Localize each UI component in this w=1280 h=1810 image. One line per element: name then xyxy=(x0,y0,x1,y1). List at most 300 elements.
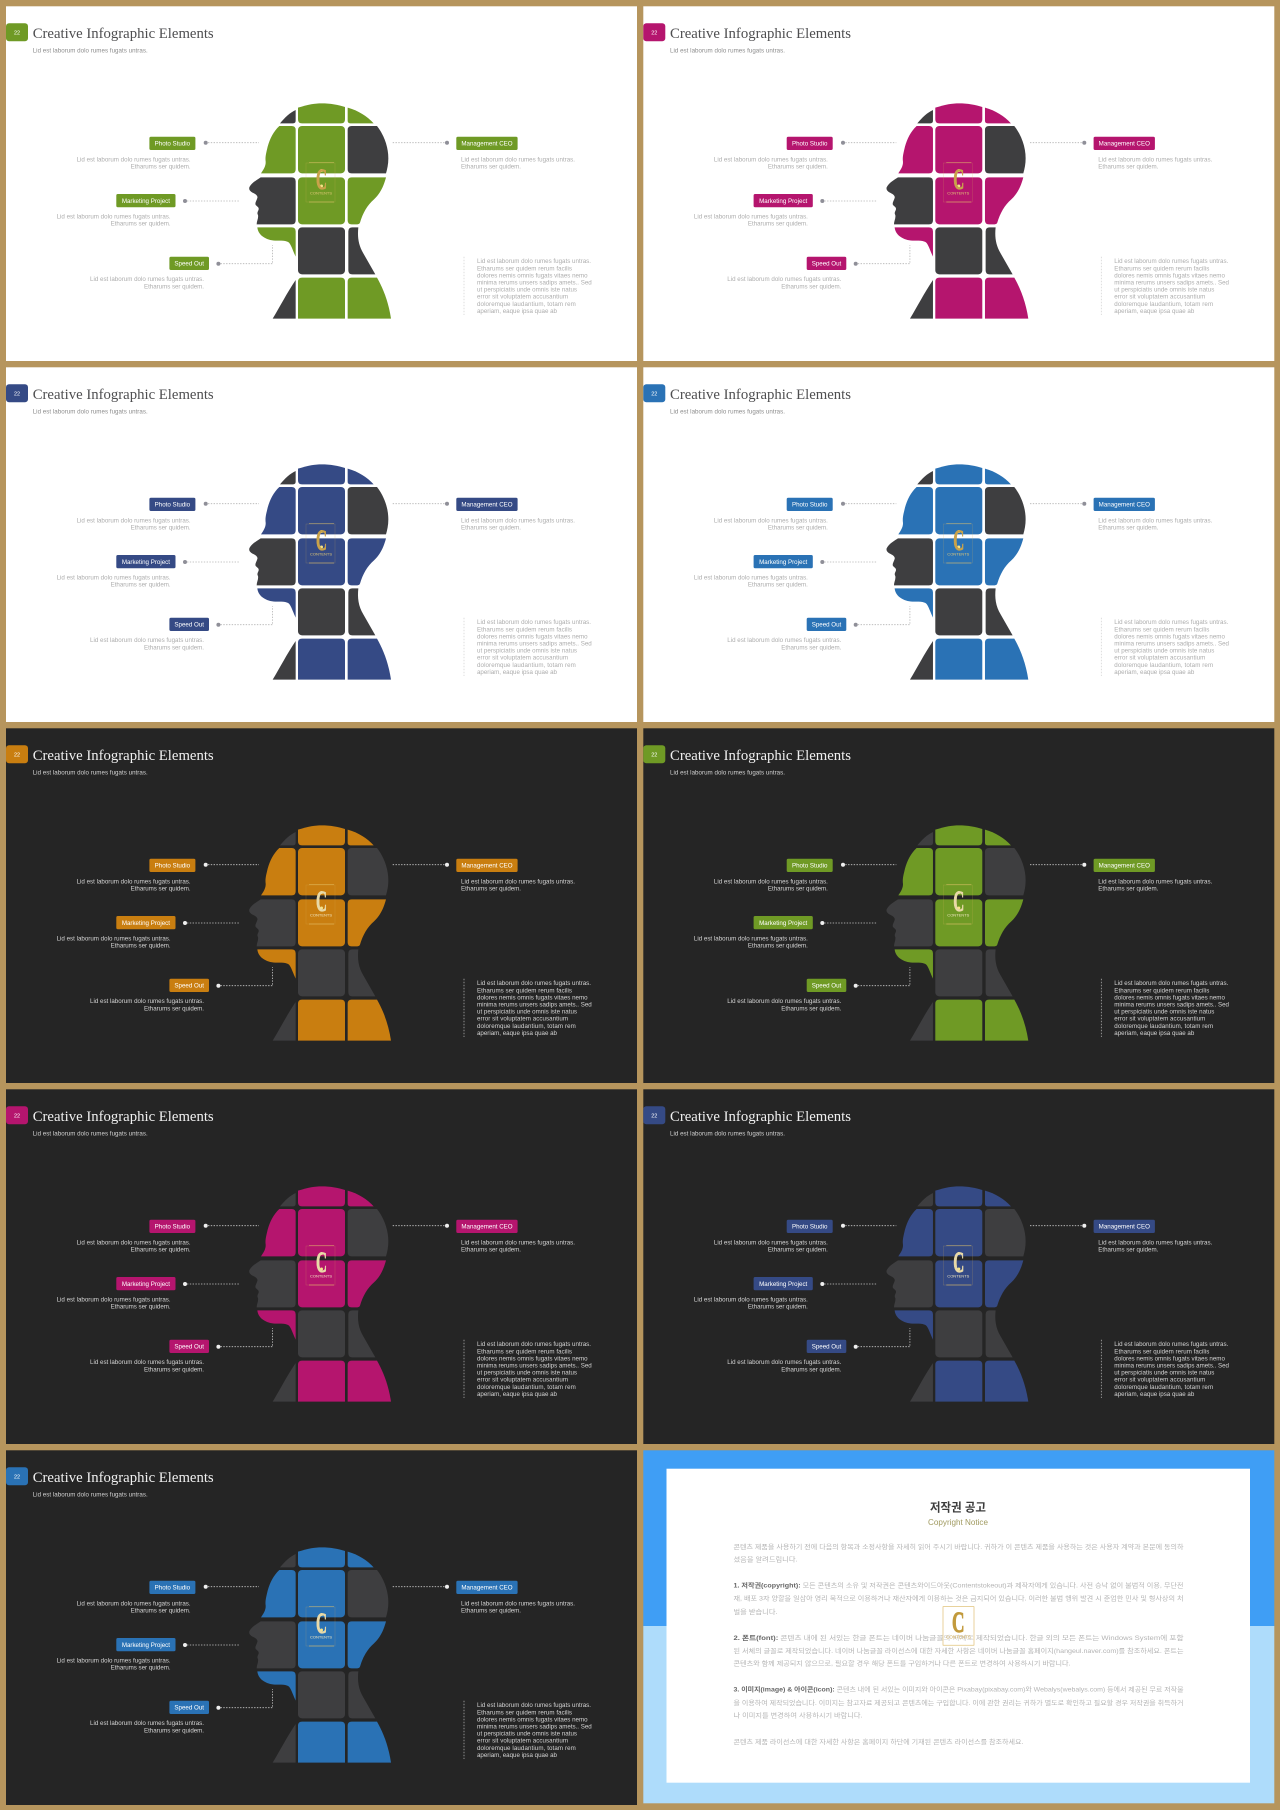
label: Management CEO: Management CEO xyxy=(461,862,513,870)
panel: navy light slide xyxy=(6,367,637,722)
text block: paragraph xyxy=(464,1340,592,1398)
text block: paragraph: dolores nemis omnis fugats vitaes nemo xyxy=(477,1355,588,1362)
text: Speed Out description: Etharums ser quidem. xyxy=(781,1367,842,1374)
text block: paragraph: doloremque laudantium, totam rem xyxy=(477,1384,576,1391)
label: Management CEO xyxy=(1094,137,1155,150)
label: Management CEO: Management CEO xyxy=(461,1224,513,1230)
label: Photo Studio xyxy=(787,859,833,872)
text block: paragraph: ut perspiciatis unde omnis iste natus xyxy=(477,1731,577,1738)
text block: paragraph: aperiam, eaque ipsa quae ab xyxy=(477,308,558,315)
label: Speed Out xyxy=(169,618,209,631)
text: Marketing Project description xyxy=(57,213,171,228)
text block: paragraph: doloremque laudantium, totam rem xyxy=(477,662,576,669)
text: Photo Studio description xyxy=(77,156,191,170)
subtitle: Lid est laborum dolo rumes fugats untras. xyxy=(33,408,148,415)
label: Photo Studio xyxy=(149,1581,195,1594)
text block: paragraph: aperiam, eaque ipsa quae ab xyxy=(1114,1030,1195,1037)
label: Marketing Project: Marketing Project xyxy=(759,920,808,927)
text: Management CEO description xyxy=(461,156,575,170)
text block: paragraph: aperiam, eaque ipsa quae ab xyxy=(1114,1391,1195,1398)
text: Management CEO description: Etharums ser quidem. xyxy=(1098,164,1159,170)
label: Photo Studio: Photo Studio xyxy=(792,862,828,870)
text: Photo Studio description: Etharums ser quidem. xyxy=(131,1608,191,1614)
text: Speed Out description: Etharums ser quidem. xyxy=(144,645,204,652)
text: Management CEO description xyxy=(1098,156,1213,170)
text: Photo Studio description xyxy=(714,1239,828,1254)
text block: paragraph: Etharums ser quidem rerum facilis xyxy=(477,626,572,633)
panel: blue dark slide xyxy=(6,1450,637,1805)
connector: Marketing Project xyxy=(183,199,239,203)
text: Speed Out description: Lid est laborum dolo rumes fugats untras. xyxy=(727,1359,842,1366)
connector: Management CEO xyxy=(393,141,449,145)
icon: head silhouette xyxy=(887,464,1028,680)
text: Speed Out description: Lid est laborum dolo rumes fugats untras. xyxy=(90,637,204,644)
label: Speed Out: Speed Out xyxy=(812,260,842,268)
label: Marketing Project xyxy=(116,194,176,207)
text block: paragraph: dolores nemis omnis fugats vitaes nemo xyxy=(477,633,588,640)
connector: Speed Out xyxy=(216,606,273,627)
label: Management CEO xyxy=(1094,859,1155,872)
label: Management CEO: Management CEO xyxy=(461,502,513,508)
text: Marketing Project description: Lid est laborum dolo rumes fugats untras. xyxy=(694,1296,808,1303)
logo watermark xyxy=(943,1606,974,1645)
logo watermark: CONTENTS xyxy=(947,912,970,918)
text block: paragraph: minima rerums unsers sadips amets.. Sed xyxy=(477,280,592,287)
text block: paragraph: dolores nemis omnis fugats vitaes nemo xyxy=(1114,272,1225,279)
icon: head silhouette xyxy=(249,1547,391,1763)
text block: paragraph: Lid est laborum dolo rumes fugats untras. xyxy=(1114,1341,1229,1348)
text block: paragraph: Etharums ser quidem rerum facilis xyxy=(1114,987,1209,994)
text: Marketing Project description xyxy=(694,213,808,228)
badge xyxy=(643,745,665,763)
badge xyxy=(6,1106,28,1124)
connector: Speed Out xyxy=(854,245,910,266)
text block: copyright terms: 된 서체의 글꼴로 제작되었습니다. 네이버 나눔글꼴 라이선스에 대한 자세한 사항은 네이버 나눔글꼴 홈페이지(hangeul.naver.com)를 참조하세요. 폰트는 xyxy=(734,1646,1184,1655)
panel: green dark slide xyxy=(643,728,1274,1083)
text: Speed Out description xyxy=(90,637,204,652)
logo watermark: CONTENTS xyxy=(947,1274,970,1278)
text: Marketing Project description: Lid est laborum dolo rumes fugats untras. xyxy=(57,935,171,942)
connector: Speed Out xyxy=(854,606,910,627)
label: Photo Studio xyxy=(787,498,833,511)
label: Management CEO: Management CEO xyxy=(461,140,513,148)
text block: paragraph: aperiam, eaque ipsa quae ab xyxy=(477,1030,558,1037)
text block: copyright terms: 벌을 받습니다. xyxy=(734,1607,778,1616)
text block: paragraph: dolores nemis omnis fugats vitaes nemo xyxy=(477,1716,588,1723)
label: Management CEO xyxy=(456,1220,518,1233)
text block: paragraph: aperiam, eaque ipsa quae ab xyxy=(1114,308,1195,315)
logo watermark xyxy=(306,1246,335,1285)
connector: Speed Out xyxy=(854,967,910,988)
logo watermark: CONTENTS xyxy=(310,912,332,918)
subtitle: Lid est laborum dolo rumes fugats untras. xyxy=(670,1130,785,1137)
badge xyxy=(6,1467,28,1485)
text block: paragraph: Lid est laborum dolo rumes fugats untras. xyxy=(477,619,591,626)
title: Creative Infographic Elements xyxy=(33,26,214,42)
text: Photo Studio description: Etharums ser quidem. xyxy=(768,886,828,892)
logo watermark xyxy=(306,885,335,924)
badge xyxy=(643,23,665,41)
connector: Speed Out xyxy=(216,1328,273,1349)
text: Speed Out description: Etharums ser quidem. xyxy=(144,1006,204,1013)
text: Photo Studio description: Lid est laborum dolo rumes fugats untras. xyxy=(77,1600,191,1607)
text: Photo Studio description: Lid est laborum dolo rumes fugats untras. xyxy=(77,517,191,524)
subtitle: Lid est laborum dolo rumes fugats untras. xyxy=(670,47,785,54)
connector: Photo Studio xyxy=(204,1585,259,1589)
text: Speed Out description: Lid est laborum dolo rumes fugats untras. xyxy=(90,276,204,283)
text: Management CEO description: Lid est laborum dolo rumes fugats untras. xyxy=(461,1600,575,1607)
logo watermark xyxy=(306,524,335,563)
subheading: Copyright Notice: Copyright Notice xyxy=(928,1518,989,1527)
text block: paragraph: ut perspiciatis unde omnis iste natus xyxy=(477,287,577,294)
icon: head silhouette xyxy=(249,1186,391,1402)
connector: Photo Studio xyxy=(841,502,896,506)
panel: navy dark slide xyxy=(643,1089,1274,1444)
text: Marketing Project description: Etharums ser quidem. xyxy=(748,1304,808,1311)
text block: paragraph: dolores nemis omnis fugats vitaes nemo xyxy=(1114,994,1225,1001)
badge: 22 xyxy=(651,30,657,36)
text block: paragraph: aperiam, eaque ipsa quae ab xyxy=(477,669,558,676)
icon: head silhouette xyxy=(887,825,1028,1041)
title: Creative Infographic Elements xyxy=(33,387,214,403)
text: Photo Studio description: Etharums ser quidem. xyxy=(131,1246,191,1254)
label: Management CEO: Management CEO xyxy=(1099,140,1150,148)
label: Marketing Project: Marketing Project xyxy=(759,198,808,205)
connector: Photo Studio xyxy=(841,141,896,145)
label: Photo Studio xyxy=(149,137,195,150)
label: Marketing Project: Marketing Project xyxy=(759,559,808,566)
badge xyxy=(643,1106,665,1124)
text block: copyright terms: 콘텐츠 제품을 사용하기 전에 다음의 항목과 소정사항을 자세히 읽어 주시기 바랍니다. 귀하가 이 콘텐츠 제품을 사용하는 것은 사용자 계약과 본문에 동의하 xyxy=(734,1542,1184,1551)
label: Speed Out: Speed Out xyxy=(174,1344,204,1350)
text block: paragraph: dolores nemis omnis fugats vitaes nemo xyxy=(477,994,588,1001)
subtitle: Lid est laborum dolo rumes fugats untras. xyxy=(33,1130,148,1137)
label: Speed Out: Speed Out xyxy=(174,260,204,268)
icon: head silhouette xyxy=(887,1186,1028,1402)
label: Marketing Project: Marketing Project xyxy=(122,1281,170,1288)
text block: paragraph: error sit voluptatem accusantium xyxy=(477,294,568,301)
text block: paragraph: doloremque laudantium, totam rem xyxy=(477,1745,576,1752)
label: Photo Studio: Photo Studio xyxy=(155,1224,191,1230)
text block: paragraph: Lid est laborum dolo rumes fugats untras. xyxy=(477,980,591,987)
text block: paragraph: error sit voluptatem accusantium xyxy=(477,1016,568,1023)
title: Creative Infographic Elements xyxy=(33,1109,214,1125)
logo watermark: C xyxy=(953,524,964,557)
text block: paragraph: doloremque laudantium, totam rem xyxy=(477,301,576,308)
label: Photo Studio: Photo Studio xyxy=(155,502,191,508)
connector: Speed Out xyxy=(854,1328,910,1349)
text: Marketing Project description xyxy=(694,574,808,589)
text block: paragraph: Etharums ser quidem rerum facilis xyxy=(477,987,572,994)
label: Management CEO xyxy=(1094,498,1155,511)
logo watermark: CONTENTS xyxy=(947,552,970,556)
text: Photo Studio description xyxy=(714,156,828,170)
text: Speed Out description xyxy=(727,276,842,291)
connector: Speed Out xyxy=(216,967,273,988)
label: Marketing Project xyxy=(116,1638,176,1651)
connector: Management CEO xyxy=(1030,863,1086,867)
text: Photo Studio description: Lid est laborum dolo rumes fugats untras. xyxy=(714,1239,828,1246)
text block: paragraph: Etharums ser quidem rerum facilis xyxy=(477,265,572,272)
panel: magenta dark slide xyxy=(6,1089,637,1444)
logo watermark: C xyxy=(316,163,327,196)
text block: paragraph: error sit voluptatem accusantium xyxy=(477,655,568,662)
text block: paragraph: ut perspiciatis unde omnis iste natus xyxy=(1114,1370,1214,1377)
title: Creative Infographic Elements xyxy=(670,748,851,764)
text block: paragraph: ut perspiciatis unde omnis iste natus xyxy=(1114,1009,1214,1016)
badge: 22 xyxy=(14,392,20,398)
logo watermark xyxy=(943,524,972,563)
icon: head silhouette xyxy=(249,464,391,680)
label: Speed Out xyxy=(807,257,846,270)
text block: paragraph: Lid est laborum dolo rumes fugats untras. xyxy=(1114,980,1229,987)
subtitle: Lid est laborum dolo rumes fugats untras. xyxy=(33,47,148,54)
label: Speed Out xyxy=(169,1340,209,1353)
text: Management CEO description xyxy=(461,517,575,532)
text: Speed Out description: Etharums ser quidem. xyxy=(144,1367,204,1374)
text block: copyright terms: 셨음을 알려드립니다. xyxy=(734,1555,798,1564)
text: Photo Studio description: Lid est laborum dolo rumes fugats untras. xyxy=(77,878,191,885)
text block: paragraph: dolores nemis omnis fugats vitaes nemo xyxy=(1114,633,1225,640)
connector: Marketing Project xyxy=(183,921,239,925)
text block: paragraph: Lid est laborum dolo rumes fugats untras. xyxy=(1114,258,1229,265)
text block: paragraph: minima rerums unsers sadips amets.. Sed xyxy=(477,1724,592,1731)
text: Speed Out description: Etharums ser quidem. xyxy=(144,1728,204,1735)
icon: head silhouette xyxy=(249,825,391,1041)
text: Management CEO description xyxy=(461,1600,575,1614)
text block: paragraph: Etharums ser quidem rerum facilis xyxy=(477,1709,572,1716)
label: Speed Out xyxy=(169,257,209,270)
label: Speed Out xyxy=(169,979,209,992)
text: Speed Out description: Lid est laborum dolo rumes fugats untras. xyxy=(727,276,842,283)
connector: Photo Studio xyxy=(841,863,896,867)
logo watermark: C xyxy=(316,1246,327,1279)
connector: Marketing Project xyxy=(820,560,876,564)
connector: Marketing Project xyxy=(183,1282,239,1286)
logo watermark: C xyxy=(316,524,327,557)
badge: 22 xyxy=(651,752,657,758)
subtitle: Lid est laborum dolo rumes fugats untras. xyxy=(670,769,785,776)
text: Management CEO description xyxy=(1098,878,1213,892)
text: Management CEO description: Lid est laborum dolo rumes fugats untras. xyxy=(461,156,575,163)
label: Photo Studio: Photo Studio xyxy=(155,1584,191,1592)
title: Creative Infographic Elements xyxy=(670,387,851,403)
text: Photo Studio description: Lid est laborum dolo rumes fugats untras. xyxy=(714,156,828,163)
label: Photo Studio xyxy=(787,137,833,150)
text: Photo Studio description: Lid est laborum dolo rumes fugats untras. xyxy=(714,517,828,524)
text: Management CEO description: Etharums ser quidem. xyxy=(461,1608,521,1614)
text block: paragraph: ut perspiciatis unde omnis iste natus xyxy=(1114,287,1214,294)
text block: paragraph: ut perspiciatis unde omnis iste natus xyxy=(1114,648,1214,655)
logo watermark: C xyxy=(316,1607,327,1640)
text: Photo Studio description: Etharums ser quidem. xyxy=(768,1246,828,1254)
connector: Management CEO xyxy=(1030,1224,1086,1228)
text block: paragraph: aperiam, eaque ipsa quae ab xyxy=(477,1391,558,1398)
text: Management CEO description: Etharums ser quidem. xyxy=(1098,524,1159,532)
text block: paragraph: error sit voluptatem accusantium xyxy=(1114,655,1205,662)
text block: paragraph xyxy=(464,979,592,1037)
label: Speed Out xyxy=(807,979,846,992)
label: Marketing Project: Marketing Project xyxy=(122,559,170,566)
label: Marketing Project: Marketing Project xyxy=(759,1281,808,1288)
label: Photo Studio xyxy=(149,859,195,872)
text: Management CEO description: Etharums ser quidem. xyxy=(461,886,521,892)
title: Creative Infographic Elements xyxy=(33,748,214,764)
connector: Photo Studio xyxy=(204,863,259,867)
text: Speed Out description: Lid est laborum dolo rumes fugats untras. xyxy=(90,1720,204,1727)
badge xyxy=(6,745,28,763)
text block: paragraph: aperiam, eaque ipsa quae ab xyxy=(477,1752,558,1759)
subtitle: Lid est laborum dolo rumes fugats untras. xyxy=(670,408,785,415)
connector: Photo Studio xyxy=(841,1224,896,1228)
text block: paragraph: minima rerums unsers sadips amets.. Sed xyxy=(477,641,592,648)
text block: copyright terms: 나 이미지를 변경하여 사용하시기 바랍니다. xyxy=(734,1711,863,1720)
label: Marketing Project xyxy=(754,1277,813,1290)
badge xyxy=(643,384,665,402)
icon: head silhouette xyxy=(887,103,1028,319)
connector: Photo Studio xyxy=(204,502,259,506)
text: Speed Out description: Etharums ser quidem. xyxy=(144,284,204,291)
label: Photo Studio xyxy=(149,1220,195,1233)
badge: 22 xyxy=(14,30,20,36)
text: Management CEO description: Etharums ser quidem. xyxy=(1098,886,1159,892)
text block: copyright terms: 콘텐츠와 함께 제공되지 않으므로, 필요할 경우 해당 폰트를 구입하거나 다른 폰트로 변경하여 사용하시기 바랍니다. xyxy=(734,1659,1071,1668)
text block: paragraph xyxy=(1101,618,1230,676)
label: Marketing Project xyxy=(754,555,813,568)
label: Photo Studio: Photo Studio xyxy=(155,862,191,870)
badge: 22 xyxy=(14,1114,20,1120)
text: Management CEO description: Lid est laborum dolo rumes fugats untras. xyxy=(1098,878,1213,885)
label: Management CEO: Management CEO xyxy=(1099,502,1150,508)
panel: orange dark slide xyxy=(6,728,637,1083)
connector: Management CEO xyxy=(393,863,449,867)
text: Management CEO description: Lid est laborum dolo rumes fugats untras. xyxy=(461,1239,575,1246)
badge xyxy=(6,23,28,41)
label: Management CEO: Management CEO xyxy=(1099,1224,1150,1230)
connector: Management CEO xyxy=(1030,141,1086,145)
text: Marketing Project description: Lid est laborum dolo rumes fugats untras. xyxy=(57,1657,171,1664)
text: Marketing Project description: Lid est laborum dolo rumes fugats untras. xyxy=(57,1296,171,1303)
text: Management CEO description: Lid est laborum dolo rumes fugats untras. xyxy=(461,878,575,885)
text: Marketing Project description: Lid est laborum dolo rumes fugats untras. xyxy=(57,213,171,220)
text: Management CEO description: Etharums ser quidem. xyxy=(461,164,521,170)
logo watermark: CONTENTS xyxy=(310,1274,332,1278)
text block: paragraph: Lid est laborum dolo rumes fugats untras. xyxy=(477,1702,591,1709)
connector: Management CEO xyxy=(1030,502,1086,506)
text: Photo Studio description xyxy=(714,517,828,532)
text: Photo Studio description: Etharums ser quidem. xyxy=(131,524,191,532)
text: Marketing Project description: Lid est laborum dolo rumes fugats untras. xyxy=(57,574,171,581)
text: Speed Out description xyxy=(90,998,204,1013)
connector: Management CEO xyxy=(393,1585,449,1589)
logo watermark xyxy=(943,885,972,924)
label: Management CEO xyxy=(456,859,518,872)
badge: 22 xyxy=(651,1114,657,1120)
logo watermark: C xyxy=(953,1246,964,1279)
title: Creative Infographic Elements xyxy=(670,1109,851,1125)
text: Speed Out description xyxy=(90,1720,204,1735)
text: Marketing Project description: Etharums ser quidem. xyxy=(111,1304,171,1311)
logo watermark: C xyxy=(953,885,964,918)
text block: paragraph: error sit voluptatem accusantium xyxy=(477,1377,568,1384)
text: Speed Out description: Lid est laborum dolo rumes fugats untras. xyxy=(727,998,842,1005)
title: Creative Infographic Elements xyxy=(670,26,851,42)
text block: copyright terms: 1. 저작권(copyright): 모든 콘텐츠의 소유 및 저작권은 콘텐츠와이드아웃(Contentstokeout)과 제작자에게 있습니다. 사전 승낙 없이 불법적 이용, 무단전 xyxy=(734,1581,1184,1590)
text block: paragraph xyxy=(1101,257,1230,315)
text block: paragraph: minima rerums unsers sadips amets.. Sed xyxy=(1114,1363,1230,1370)
text block: paragraph: Etharums ser quidem rerum facilis xyxy=(477,1348,572,1355)
logo watermark: CONTENTS xyxy=(310,190,332,196)
badge: 22 xyxy=(14,752,20,758)
text block: paragraph: Etharums ser quidem rerum facilis xyxy=(1114,265,1209,272)
text block: paragraph: dolores nemis omnis fugats vitaes nemo xyxy=(477,272,588,279)
text block: paragraph: minima rerums unsers sadips amets.. Sed xyxy=(1114,1002,1230,1009)
label: Photo Studio: Photo Studio xyxy=(155,140,191,148)
logo watermark: CONTENTS xyxy=(946,1634,971,1640)
text: Photo Studio description xyxy=(77,517,191,532)
label: Marketing Project: Marketing Project xyxy=(122,1642,170,1649)
text: Marketing Project description: Etharums ser quidem. xyxy=(111,582,171,589)
connector: Marketing Project xyxy=(183,560,239,564)
badge: 22 xyxy=(651,392,657,398)
text block: paragraph: minima rerums unsers sadips amets.. Sed xyxy=(477,1363,592,1370)
label: Management CEO xyxy=(456,498,518,511)
label: Speed Out: Speed Out xyxy=(812,622,842,628)
text: Marketing Project description xyxy=(57,574,171,589)
text: Marketing Project description: Etharums ser quidem. xyxy=(111,1665,171,1672)
text: Management CEO description xyxy=(461,878,575,892)
text block: paragraph: ut perspiciatis unde omnis iste natus xyxy=(477,1009,577,1016)
text: Marketing Project description xyxy=(57,1296,171,1311)
panel: magenta light slide xyxy=(643,6,1274,361)
label: Speed Out xyxy=(807,1340,846,1353)
text block: copyright terms: 을 이용하여 제작되었습니다. 이미지는 참고자료 제공되고 콘텐츠에는 구입합니다. 이에 관한 권리는 귀하가 별도로 확인하고 필요할 경우 저작권을 취득하거 xyxy=(734,1698,1184,1707)
label: Photo Studio xyxy=(149,498,195,511)
label: Management CEO: Management CEO xyxy=(1099,862,1150,870)
label: Management CEO xyxy=(456,137,518,150)
text: Marketing Project description: Etharums ser quidem. xyxy=(748,221,808,228)
text block: paragraph: doloremque laudantium, totam rem xyxy=(1114,301,1213,308)
text: Marketing Project description xyxy=(694,1296,808,1311)
text: Marketing Project description: Etharums ser quidem. xyxy=(111,221,171,228)
text block: paragraph: error sit voluptatem accusantium xyxy=(1114,294,1205,301)
text: Management CEO description: Lid est laborum dolo rumes fugats untras. xyxy=(1098,156,1213,163)
text block: paragraph: Etharums ser quidem rerum facilis xyxy=(1114,1348,1209,1355)
text: Photo Studio description xyxy=(77,1600,191,1614)
text block: paragraph: Lid est laborum dolo rumes fugats untras. xyxy=(1114,619,1229,626)
connector: Photo Studio xyxy=(204,141,259,145)
heading: copyright notice Korean: 저작권 공고 xyxy=(930,1500,986,1514)
text block: copyright terms xyxy=(734,1542,1184,1746)
title: Creative Infographic Elements xyxy=(33,1470,214,1486)
logo watermark xyxy=(306,1607,335,1646)
text: Marketing Project description: Lid est laborum dolo rumes fugats untras. xyxy=(694,213,808,220)
text: Marketing Project description: Etharums ser quidem. xyxy=(748,943,808,950)
text: Photo Studio description xyxy=(77,878,191,892)
text: Marketing Project description: Lid est laborum dolo rumes fugats untras. xyxy=(694,574,808,581)
text: Marketing Project description: Lid est laborum dolo rumes fugats untras. xyxy=(694,935,808,942)
label: Marketing Project xyxy=(754,916,813,929)
text block: paragraph: Lid est laborum dolo rumes fugats untras. xyxy=(477,258,591,265)
text: Speed Out description xyxy=(90,276,204,291)
text: Photo Studio description: Etharums ser quidem. xyxy=(768,164,828,170)
label: Management CEO xyxy=(1094,1220,1155,1233)
text: Management CEO description xyxy=(1098,1239,1213,1254)
text: Speed Out description xyxy=(727,1359,842,1374)
connector: Photo Studio xyxy=(204,1224,259,1228)
text: Speed Out description xyxy=(727,998,842,1013)
text: Speed Out description: Lid est laborum dolo rumes fugats untras. xyxy=(727,637,842,644)
